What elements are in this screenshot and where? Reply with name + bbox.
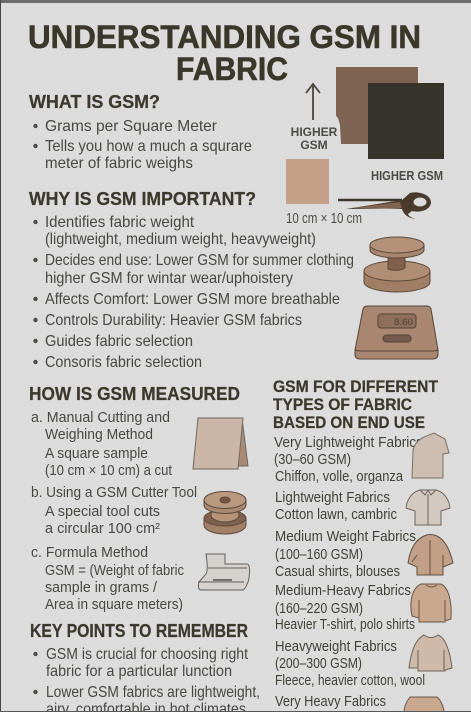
bullet list: definition: Grams per Square Meter (45, 118, 217, 135)
method a: manual cutting: A square sample (45, 446, 148, 462)
icon: scissors (338, 192, 431, 219)
item: lightweight (275, 490, 397, 523)
icon: brown fabric swatch (336, 67, 418, 144)
icon: folded fabric sample (193, 418, 248, 469)
heading: GSM for different types: GSM FOR DIFFERENT (273, 377, 439, 396)
bullet list: definition: Tells you how a much a squrare (45, 138, 252, 155)
item: very lightweight: (30–60 GSM) (274, 452, 351, 468)
icon: 10 cm sample square (286, 159, 329, 204)
bullet list: definition: meter of fabric weighs (45, 155, 193, 172)
item: medium weight: Casual shirts, blouses (275, 564, 400, 580)
heading: GSM for different types (273, 377, 439, 432)
method a: manual cutting: (10 cm × 10 cm) a cut (45, 463, 172, 479)
item: heavyweight: Heavyweight Fabrics (275, 639, 397, 655)
item: lightweight: Lightweight Fabrics (275, 490, 390, 506)
icon: jacket (408, 534, 453, 575)
item: very lightweight: Very Lightweight Fabrics (274, 435, 423, 451)
item: medium-heavy (275, 583, 415, 633)
label: higher GSM vertical (291, 125, 338, 152)
icon: dark fabric swatch (368, 83, 444, 159)
item: heavyweight: Fleece, heavier cotton, wool (275, 673, 425, 689)
method c: formula: c. Formula Method (31, 545, 148, 561)
bullet list: key points: GSM is crucial for choosing right (46, 646, 249, 663)
label: sample size: 10 cm × 10 cm (286, 211, 362, 227)
method b: GSM cutter tool (31, 485, 197, 537)
bullet list: importance: Consoris fabric selection (45, 354, 202, 371)
label: higher GSM: HIGHER GSM (371, 169, 443, 183)
icon: medium-heavy sweater (411, 584, 451, 622)
icon: formula machine (198, 554, 250, 590)
item: medium-heavy: Heavier T-shirt, polo shirts (275, 617, 415, 633)
item: lightweight: Cotton lawn, cambric (275, 507, 397, 523)
icon: collared shirt (406, 490, 450, 525)
bullet list: key points: Lower GSM fabrics are lightweight, (46, 684, 260, 701)
method a: manual cutting: a. Manual Cutting and (31, 410, 170, 426)
bullet list: importance: Affects Comfort: Lower GSM more breathable (45, 291, 340, 308)
heading: GSM for different types: TYPES OF FABRIC (273, 395, 412, 414)
item: very lightweight (274, 435, 423, 485)
section: why is GSM important (29, 188, 354, 371)
heading: key points to remember: KEY POINTS TO REMEMBER (30, 620, 248, 641)
heading: how is GSM measured: HOW IS GSM MEASURED (29, 383, 240, 404)
method b: GSM cutter tool: A special tool cuts (45, 504, 160, 520)
heading: what is GSM: WHAT IS GSM? (29, 91, 160, 112)
bullet list: importance: Identifies fabric weight (45, 214, 195, 231)
illustration: fabric swatches (286, 67, 444, 227)
method c: formula (31, 545, 185, 613)
item: medium-heavy: Medium-Heavy Fabrics (275, 583, 411, 599)
item: very lightweight: Chiffon, volle, organza (275, 469, 403, 485)
section: what is GSM (29, 91, 252, 172)
bullet list: key points (33, 646, 260, 712)
method c: formula: GSM = (Weight of fabric (45, 563, 185, 579)
bullet list: importance: Guides fabric selection (45, 333, 193, 350)
item: heavyweight (275, 639, 425, 689)
bullet list: importance: higher GSM for wintar wear/uphoistery (45, 270, 293, 287)
method a: manual cutting: Weighing Method (45, 427, 153, 443)
item: medium weight: Medium Weight Fabrics (275, 529, 416, 545)
bullet list: definition (33, 118, 252, 172)
title: FABRIC (176, 51, 288, 87)
section: key points (30, 620, 260, 712)
bullet list: key points: fabric for a particular lunction (46, 663, 232, 680)
method b: GSM cutter tool: a circular 100 cm² (45, 521, 160, 537)
heading: why is GSM important: WHY IS GSM IMPORTANT? (29, 188, 256, 209)
icon: heavyweight sweatshirt (409, 635, 452, 671)
item: heavyweight: (200–300 GSM) (275, 656, 362, 672)
icon: spool cutter (204, 492, 246, 534)
method c: formula: Area in square meters) (45, 597, 183, 613)
icon: digital scale: 8.60 (394, 317, 413, 327)
label: higher GSM vertical: HIGHER (291, 125, 338, 139)
icon: GSM cutter tool (364, 237, 430, 292)
icon: tee shirt (412, 433, 449, 478)
icon: up arrow (306, 84, 320, 120)
bullet list: importance (33, 214, 354, 371)
method a: manual cutting (31, 410, 172, 479)
section: how is GSM measured (29, 383, 240, 613)
bullet list: importance: (lightweight, medium weight, heavyweight) (45, 231, 316, 248)
item: medium weight (275, 529, 416, 580)
heading: GSM for different types: BASED ON END USE (273, 413, 425, 432)
icon: very heavy garment (404, 697, 444, 712)
label: higher GSM vertical: GSM (300, 138, 328, 152)
section: GSM by fabric type (273, 377, 439, 710)
title: UNDERSTANDING GSM IN (28, 19, 421, 55)
item: medium-heavy: (160–220 GSM) (275, 601, 363, 617)
item: medium weight: (100–160 GSM) (275, 547, 363, 563)
item: very heavy: Very Heavy Fabrics (275, 694, 386, 710)
title (28, 19, 421, 87)
bullet list: importance: Controls Durability: Heavier GSM fabrics (45, 312, 302, 329)
bullet list: importance: Decides end use: Lower GSM for summer clothing (45, 252, 354, 269)
method c: formula: sample in grams / (45, 580, 158, 596)
method b: GSM cutter tool: b. Using a GSM Cutter Tool (31, 485, 197, 501)
icon: digital scale (355, 306, 438, 359)
